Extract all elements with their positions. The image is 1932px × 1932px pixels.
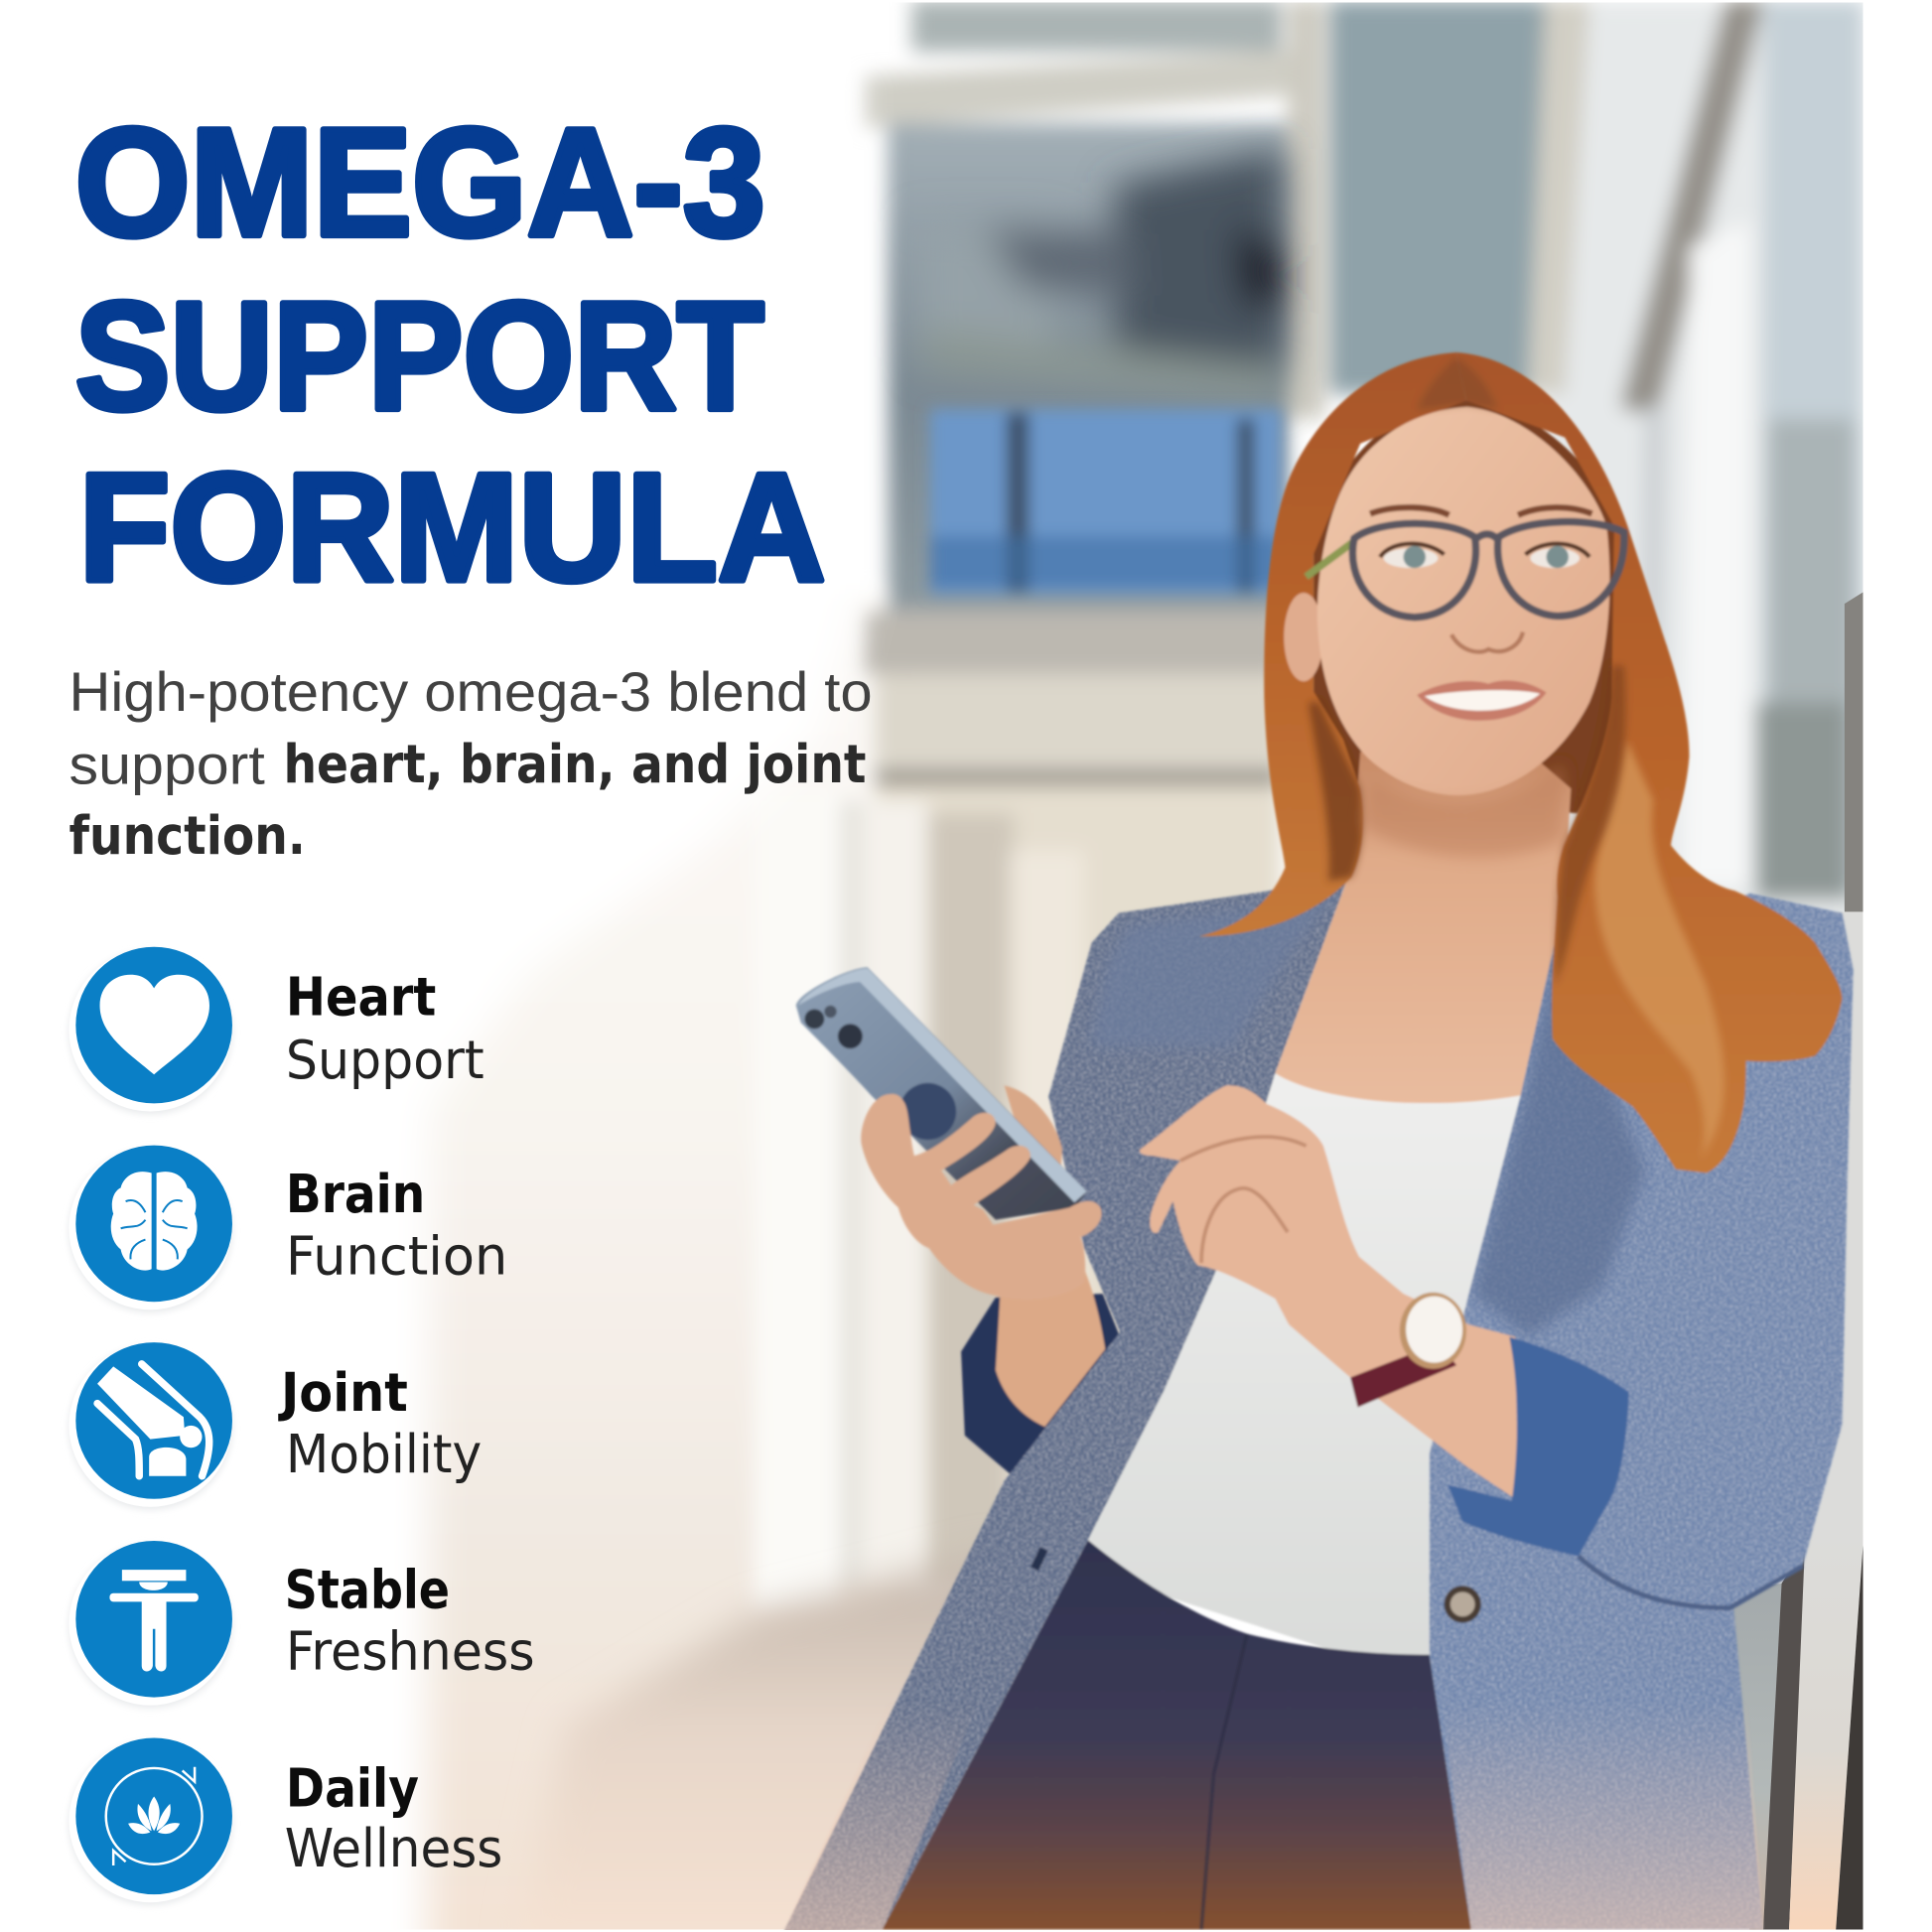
jacket left bottom peach fade [783,1701,980,1932]
benefit: brain function [69,1146,507,1312]
sleeve fold shadow [1579,1556,1803,1608]
label: brain function [286,1163,507,1287]
icon: knee joint [69,1342,232,1509]
floor [556,1553,989,1930]
lower window pane [1732,1584,1781,1930]
hair behind head [1313,400,1616,813]
label: joint mobility: Joint [278,1361,408,1424]
label: brain function: Function [286,1224,507,1287]
light pole strip lower [1789,1549,1859,1930]
title: OMEGA-3 [75,96,765,268]
right hand and forearm [1140,1085,1518,1501]
description text: support [69,733,265,795]
background photo: blurred building interior [411,2,1863,1930]
chin shadow on neck [1361,763,1563,858]
benefit: heart support [69,947,484,1114]
hand holding phone [861,1094,1101,1300]
hair right shadow [1555,665,1625,986]
hair part highlight [1417,357,1497,410]
woman holding phone [783,352,1854,1932]
jacket small buttonhole [1031,1547,1047,1571]
wristwatch [1350,1293,1466,1407]
rolled navy cuff right [1448,1337,1629,1556]
label: heart support: Support [286,1029,484,1091]
mouth [1417,681,1547,721]
white top [1088,1073,1520,1682]
nose [1451,632,1523,652]
hair right highlight [1594,740,1725,1159]
blazer left shoulder light [1098,907,1315,1046]
ear [1284,593,1323,681]
benefit: joint mobility [69,1342,482,1509]
label: brain function: Brain [286,1163,425,1225]
description text: heart, brain, and joint [283,733,866,795]
pants [883,1540,1471,1930]
label: stable freshness: Stable [285,1559,450,1621]
jacket right bottom peach fade [1442,1701,1763,1930]
description text: High-potency omega-3 blend to [69,660,873,723]
title: FORMULA [78,442,826,614]
blue reflection in window [930,409,1282,594]
glasses [1352,522,1624,618]
icon: balanced figure with level [69,1541,232,1708]
light strip beside jacket [1774,911,1864,1601]
icon: brain [69,1146,232,1312]
face [1317,407,1609,795]
jacket lapel shading [1472,949,1645,1337]
dark pole lower [1763,1545,1806,1930]
benefit: stable freshness [69,1541,535,1708]
icon: heart [69,947,232,1114]
phone [796,967,1087,1220]
eyes [1370,507,1591,568]
title [75,96,826,614]
finger behind phone [1004,1085,1062,1189]
label: daily wellness: Wellness [285,1817,502,1879]
title: SUPPORT [75,270,763,442]
window pole upper right [1845,592,1864,918]
blurred window reflections [918,148,1284,400]
label: daily wellness [285,1756,502,1879]
blazer button [1445,1586,1481,1622]
description text [69,660,873,867]
white fade overlay left side [386,93,872,1930]
far sleeve cuff [961,1294,1120,1484]
label: heart support [286,966,484,1091]
hair left shadow [1309,702,1363,881]
pants zipper line [1201,1634,1247,1930]
label: heart support: Heart [286,966,436,1029]
blazer left panel [783,868,1351,1932]
benefit: daily wellness [69,1738,502,1905]
neck and chest [1276,752,1571,1103]
label: stable freshness [285,1559,535,1683]
label: joint mobility [278,1361,482,1485]
glasses temple [1307,542,1353,577]
blazer right panel [1430,894,1854,1930]
label: daily wellness: Daily [286,1756,419,1819]
forearm holding phone [996,1269,1105,1427]
label: joint mobility: Mobility [286,1423,482,1485]
label: stable freshness: Freshness [286,1620,535,1683]
dark pole far right [1836,1528,1864,1930]
icon: lotus in cycle [69,1738,232,1905]
description text: function. [69,804,306,867]
hair right [1456,352,1842,1173]
hair left [1199,352,1466,936]
right hand finger lines [1180,1137,1307,1263]
